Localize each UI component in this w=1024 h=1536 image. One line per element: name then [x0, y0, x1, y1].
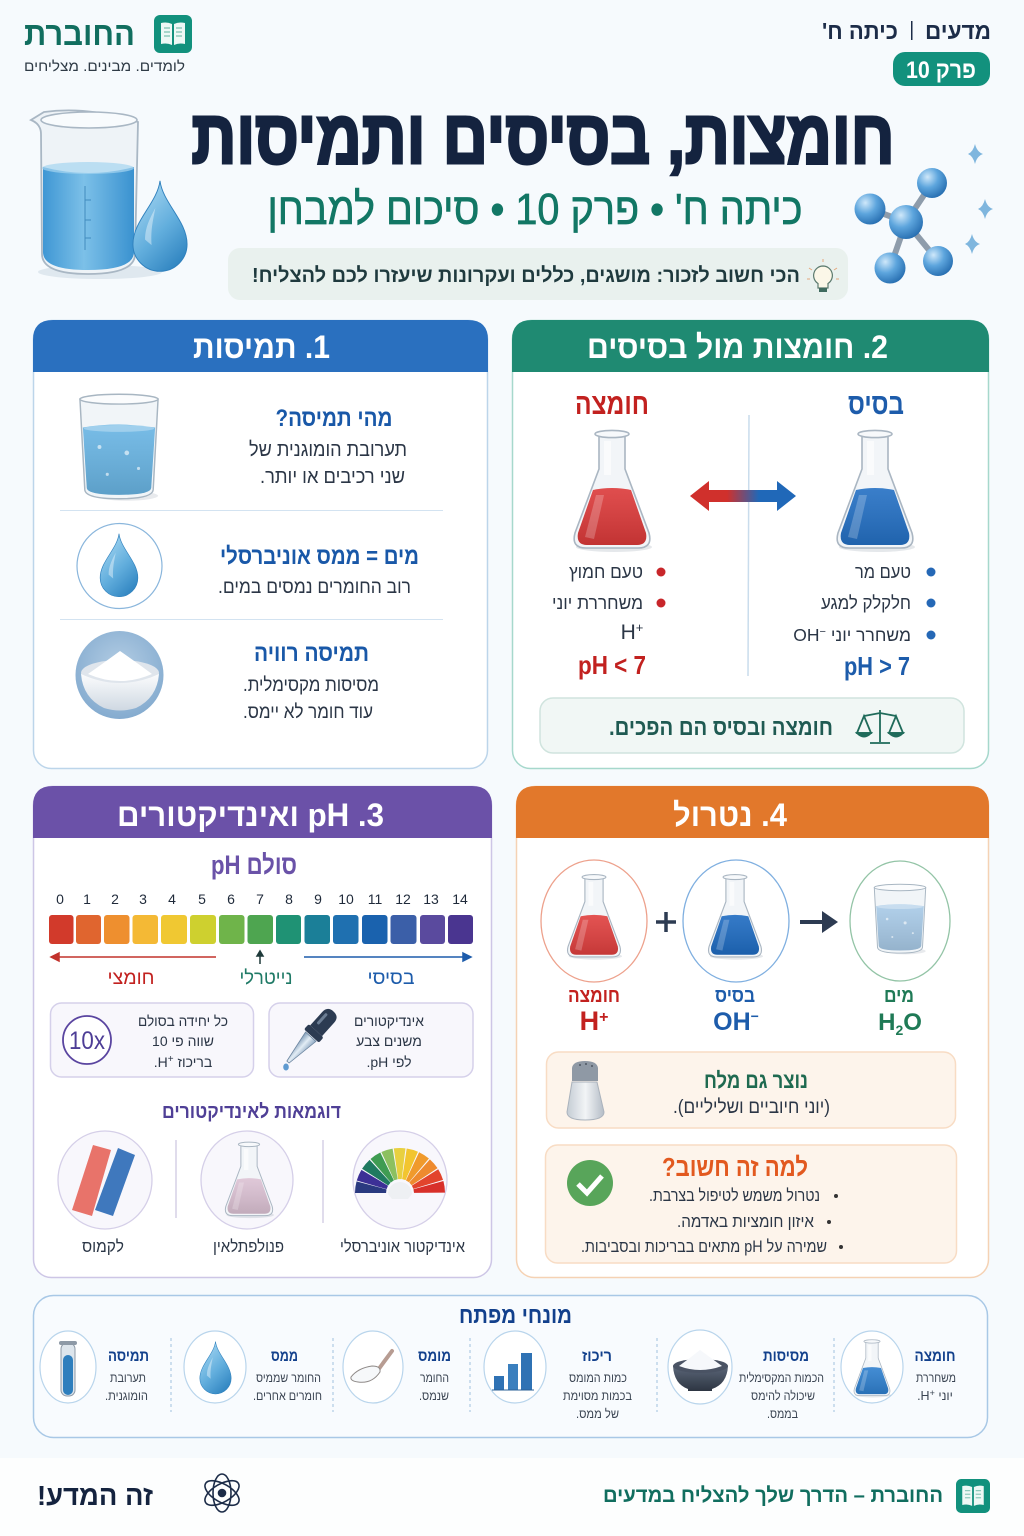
heading: indicator examples: דוגמאות לאינדיקטורים [162, 1101, 341, 1123]
reactant: base: − [751, 1008, 759, 1024]
term: solute: שנמס. [419, 1389, 449, 1403]
icon: sparkles [965, 144, 993, 254]
product: water: O [903, 1009, 922, 1036]
term: concentration [484, 1331, 632, 1421]
formula: acid pH: pH < 7 [578, 650, 646, 680]
term: concentration: כמות המומס [569, 1371, 627, 1385]
label: neutral: נייטרלי [240, 967, 292, 989]
column heading: base: בסיס [848, 388, 904, 421]
chapter pill: פרק 10 [906, 57, 976, 84]
icon: bowl of powder [76, 631, 164, 719]
text: indicators: אינדיקטורים [354, 1014, 424, 1030]
pH scale numbers: 12 [395, 891, 411, 907]
term: solution [40, 1331, 149, 1403]
icon: dropper [281, 1005, 341, 1070]
arrow: opposites [690, 481, 796, 511]
pH scale numbers: 10 [338, 891, 354, 907]
pH scale bar [49, 915, 473, 944]
text: saturated solution: עוד חומר לא יימס. [243, 702, 373, 723]
heading: key terms: מונחי מפתח [459, 1302, 572, 1328]
term: solvent: החומר שממיס [256, 1371, 321, 1385]
title: חומצות, בסיסים ותמיסות [192, 95, 894, 180]
term: acid: חומצה [914, 1348, 956, 1365]
text: tenfold: +‎ [168, 1054, 174, 1065]
callout: opposites [540, 698, 964, 753]
icon: check mark [567, 1160, 613, 1206]
heading: why it matters: למה זה חשוב? [662, 1152, 808, 1182]
pH scale numbers [56, 891, 468, 907]
icon: glass of water [80, 394, 158, 501]
text: what is a solution [249, 405, 407, 488]
term: acid: . [917, 1389, 921, 1403]
text: tenfold: שווה פי 10 [152, 1033, 214, 1049]
column heading: acid: חומצה [575, 388, 649, 421]
term: solubility: בממס. [767, 1407, 798, 1421]
text: tenfold: כל יחידה בסולם [138, 1013, 228, 1030]
text: tenfold: . [154, 1054, 158, 1070]
header logo [24, 15, 192, 75]
footer tagline: החוברת – הדרך שלך להצליח במדעים [603, 1484, 943, 1507]
product: water: H [878, 1009, 895, 1036]
icon: red flask [574, 430, 652, 552]
pH scale numbers: 1 [83, 891, 91, 907]
icon: 10x: 10x [69, 1027, 105, 1055]
footer [0, 1458, 1024, 1536]
header subject and chapter [822, 18, 991, 86]
box: tenfold per unit [50, 1003, 254, 1077]
panel: 1 solutions [33, 320, 488, 768]
icon: molecule [854, 168, 953, 284]
product: water: מים [884, 985, 914, 1007]
product: water: 2 [895, 1022, 903, 1038]
reactant: acid: + [599, 1009, 608, 1026]
list: base properties [793, 562, 936, 645]
panel header: pH and indicators: 3. pH ואינדיקטורים [117, 797, 384, 833]
pH scale numbers: 11 [368, 891, 382, 907]
icon: salt shaker [567, 1061, 604, 1120]
panel header: neutralisation [516, 786, 989, 838]
example: universal indicator [340, 1131, 466, 1256]
list: applications: איזון חומציות באדמה. [677, 1213, 815, 1231]
pH scale numbers: 13 [423, 891, 439, 907]
tip bar [228, 248, 848, 300]
term: acid: יוני H [921, 1389, 953, 1403]
text: saturated solution: מסיסות מקסימלית. [243, 675, 379, 696]
list: base properties: משחרר יוני OH [793, 625, 911, 645]
list: applications [581, 1187, 843, 1256]
text: salt forms [673, 1068, 830, 1118]
arrow: basic direction [304, 953, 471, 961]
pH scale numbers: 14 [452, 891, 468, 907]
label: universal indicator: אינדיקטור אוניברסלי [340, 1238, 466, 1256]
panel header: neutralisation: 4. נטרול [673, 797, 787, 833]
icon: atom [201, 1474, 243, 1512]
term: solubility: שיכולה להימס [751, 1389, 815, 1403]
term: concentration: ריכוז [582, 1348, 612, 1365]
list: base properties: חלקלק למגע [821, 593, 911, 613]
list: base properties: טעם מר [855, 562, 911, 582]
panel header: solutions: 1. תמיסות [193, 329, 330, 365]
box: why it matters [546, 1145, 956, 1263]
reactant: acid: H [580, 1006, 599, 1036]
list: acid properties: + [636, 620, 643, 635]
text: salt forms: (יוני חיוביים ושליליים). [673, 1097, 830, 1118]
pH scale numbers: 0 [56, 891, 64, 907]
reactant: base: בסיס [715, 985, 755, 1007]
example: phenolphthalein [201, 1131, 293, 1256]
text: tenfold [138, 1013, 228, 1070]
text: what is a solution: תערובת הומוגנית של [249, 439, 407, 461]
heading: pH scale: סולם pH [211, 850, 297, 880]
list: acid properties [552, 562, 666, 644]
pH scale numbers: 2 [111, 891, 119, 907]
term: solvent: ממס [271, 1348, 298, 1365]
label: acidic: חומצי [108, 967, 154, 989]
term: solubility: מסיסות [763, 1348, 809, 1365]
text: water universal solvent: מים = ממס אוניברסלי [220, 543, 419, 570]
grade: כיתה ח' [822, 18, 898, 44]
pH scale numbers: 5 [198, 891, 206, 907]
pH scale numbers: 4 [168, 891, 176, 907]
text: indicators: לפי pH. [366, 1054, 412, 1070]
term: solute: החומר [420, 1371, 449, 1385]
panel: 2 acids versus bases [512, 320, 989, 768]
label: phenolphthalein: פנולפתלאין [213, 1238, 284, 1256]
list: applications: נטרול משמש לטיפול בצרבת. [649, 1187, 820, 1205]
text: indicators: משנים צבע [356, 1033, 422, 1049]
label: litmus: לקמוס [82, 1238, 124, 1256]
callout: opposites: חומצה ובסיס הם הפכים. [609, 714, 833, 740]
formula: base pH: pH > 7 [844, 651, 910, 681]
product: water [850, 861, 950, 1038]
list: acid properties: טעם חמוץ [569, 562, 643, 582]
arrow: acidic direction [51, 953, 216, 961]
subject: מדעים [925, 18, 991, 44]
icon: water drop [133, 181, 187, 271]
term: solution: הומוגנית. [105, 1389, 148, 1403]
reactant: base [683, 860, 789, 1036]
term: solute [343, 1331, 451, 1403]
pH scale numbers: 8 [285, 891, 293, 907]
arrow: reaction [800, 911, 838, 933]
list: base properties: − [820, 626, 826, 638]
text: salt forms: נוצר גם מלח [704, 1068, 808, 1093]
pH scale numbers: 6 [227, 891, 235, 907]
term: solubility: הכמות המקסימלית [739, 1371, 824, 1385]
term: acid: משחררת [916, 1371, 956, 1385]
list: acid properties: H [621, 621, 636, 644]
icon: 10x [63, 1016, 111, 1064]
term: solution: תמיסה [108, 1348, 149, 1365]
panel: key terms [34, 1296, 988, 1438]
text: water universal solvent [218, 543, 419, 598]
reactant: base: OH [713, 1008, 751, 1036]
text: water universal solvent: רוב החומרים נמסים במים. [218, 577, 411, 598]
icon: light bulb [807, 259, 839, 292]
reactant: acid: חומצה [568, 985, 620, 1007]
term: solubility [668, 1330, 824, 1421]
text: indicators [354, 1014, 424, 1070]
text: saturated solution [243, 640, 379, 723]
term: acid: +‎ [930, 1388, 935, 1398]
list: applications: שמירה על pH מתאים בבריכות ובסביבות. [581, 1238, 827, 1256]
example: litmus [58, 1131, 152, 1256]
term: solvent [184, 1331, 322, 1403]
term: concentration: בכמות מסוימת [563, 1389, 632, 1403]
text: saturated solution: תמיסה רוויה [254, 640, 369, 667]
arrow: neutral marker [257, 951, 263, 964]
footer slogan: זה המדע! [37, 1480, 153, 1511]
panel: 4 neutralisation [516, 786, 989, 1278]
panel header: acids vs bases: 2. חומצות מול בסיסים [587, 329, 888, 365]
term: concentration: של ממס. [576, 1407, 619, 1421]
panel header: solutions [33, 320, 488, 372]
pH scale numbers: 7 [256, 891, 264, 907]
list: acid properties: משחררת יוני [552, 593, 643, 613]
brand name: החוברת [24, 15, 135, 52]
icon: drop in circle [77, 524, 162, 608]
text: what is a solution: שני רכיבים או יותר. [260, 466, 405, 488]
term: solute: מומס [418, 1348, 451, 1365]
tagline: לומדים. מבינים. מצליחים [24, 58, 185, 75]
icon: book logo [154, 15, 192, 53]
pH scale numbers: 3 [139, 891, 147, 907]
icon: scales [857, 710, 903, 743]
term: solution: תערובת [110, 1371, 146, 1385]
icon: book logo small [956, 1479, 990, 1513]
panel header: acids vs bases [512, 320, 989, 372]
reactant: acid [541, 860, 647, 1036]
text: what is a solution: מהי תמיסה? [276, 405, 392, 432]
tip text: הכי חשוב לזכור: מושגים, כללים ועקרונות שיעזרו לכם להצליח! [252, 264, 800, 287]
panel: 3 pH and indicators [33, 786, 492, 1278]
icon: blue flask [837, 430, 915, 552]
term: solvent: חומרים אחרים. [253, 1389, 322, 1403]
term: acid [841, 1331, 956, 1403]
subtitle: כיתה ח' • פרק 10 • סיכום למבחן [268, 185, 802, 234]
icon: beaker with water [31, 110, 162, 279]
label: basic: בסיסי [368, 967, 414, 989]
text: tenfold: בריכוז H [158, 1054, 212, 1070]
box: salt forms [546, 1052, 956, 1128]
box: indicators change colour [269, 1003, 473, 1077]
pH scale numbers: 9 [314, 891, 322, 907]
chapter pill [893, 52, 990, 86]
symbol: plus [656, 912, 676, 932]
panel header: pH and indicators [33, 786, 492, 838]
